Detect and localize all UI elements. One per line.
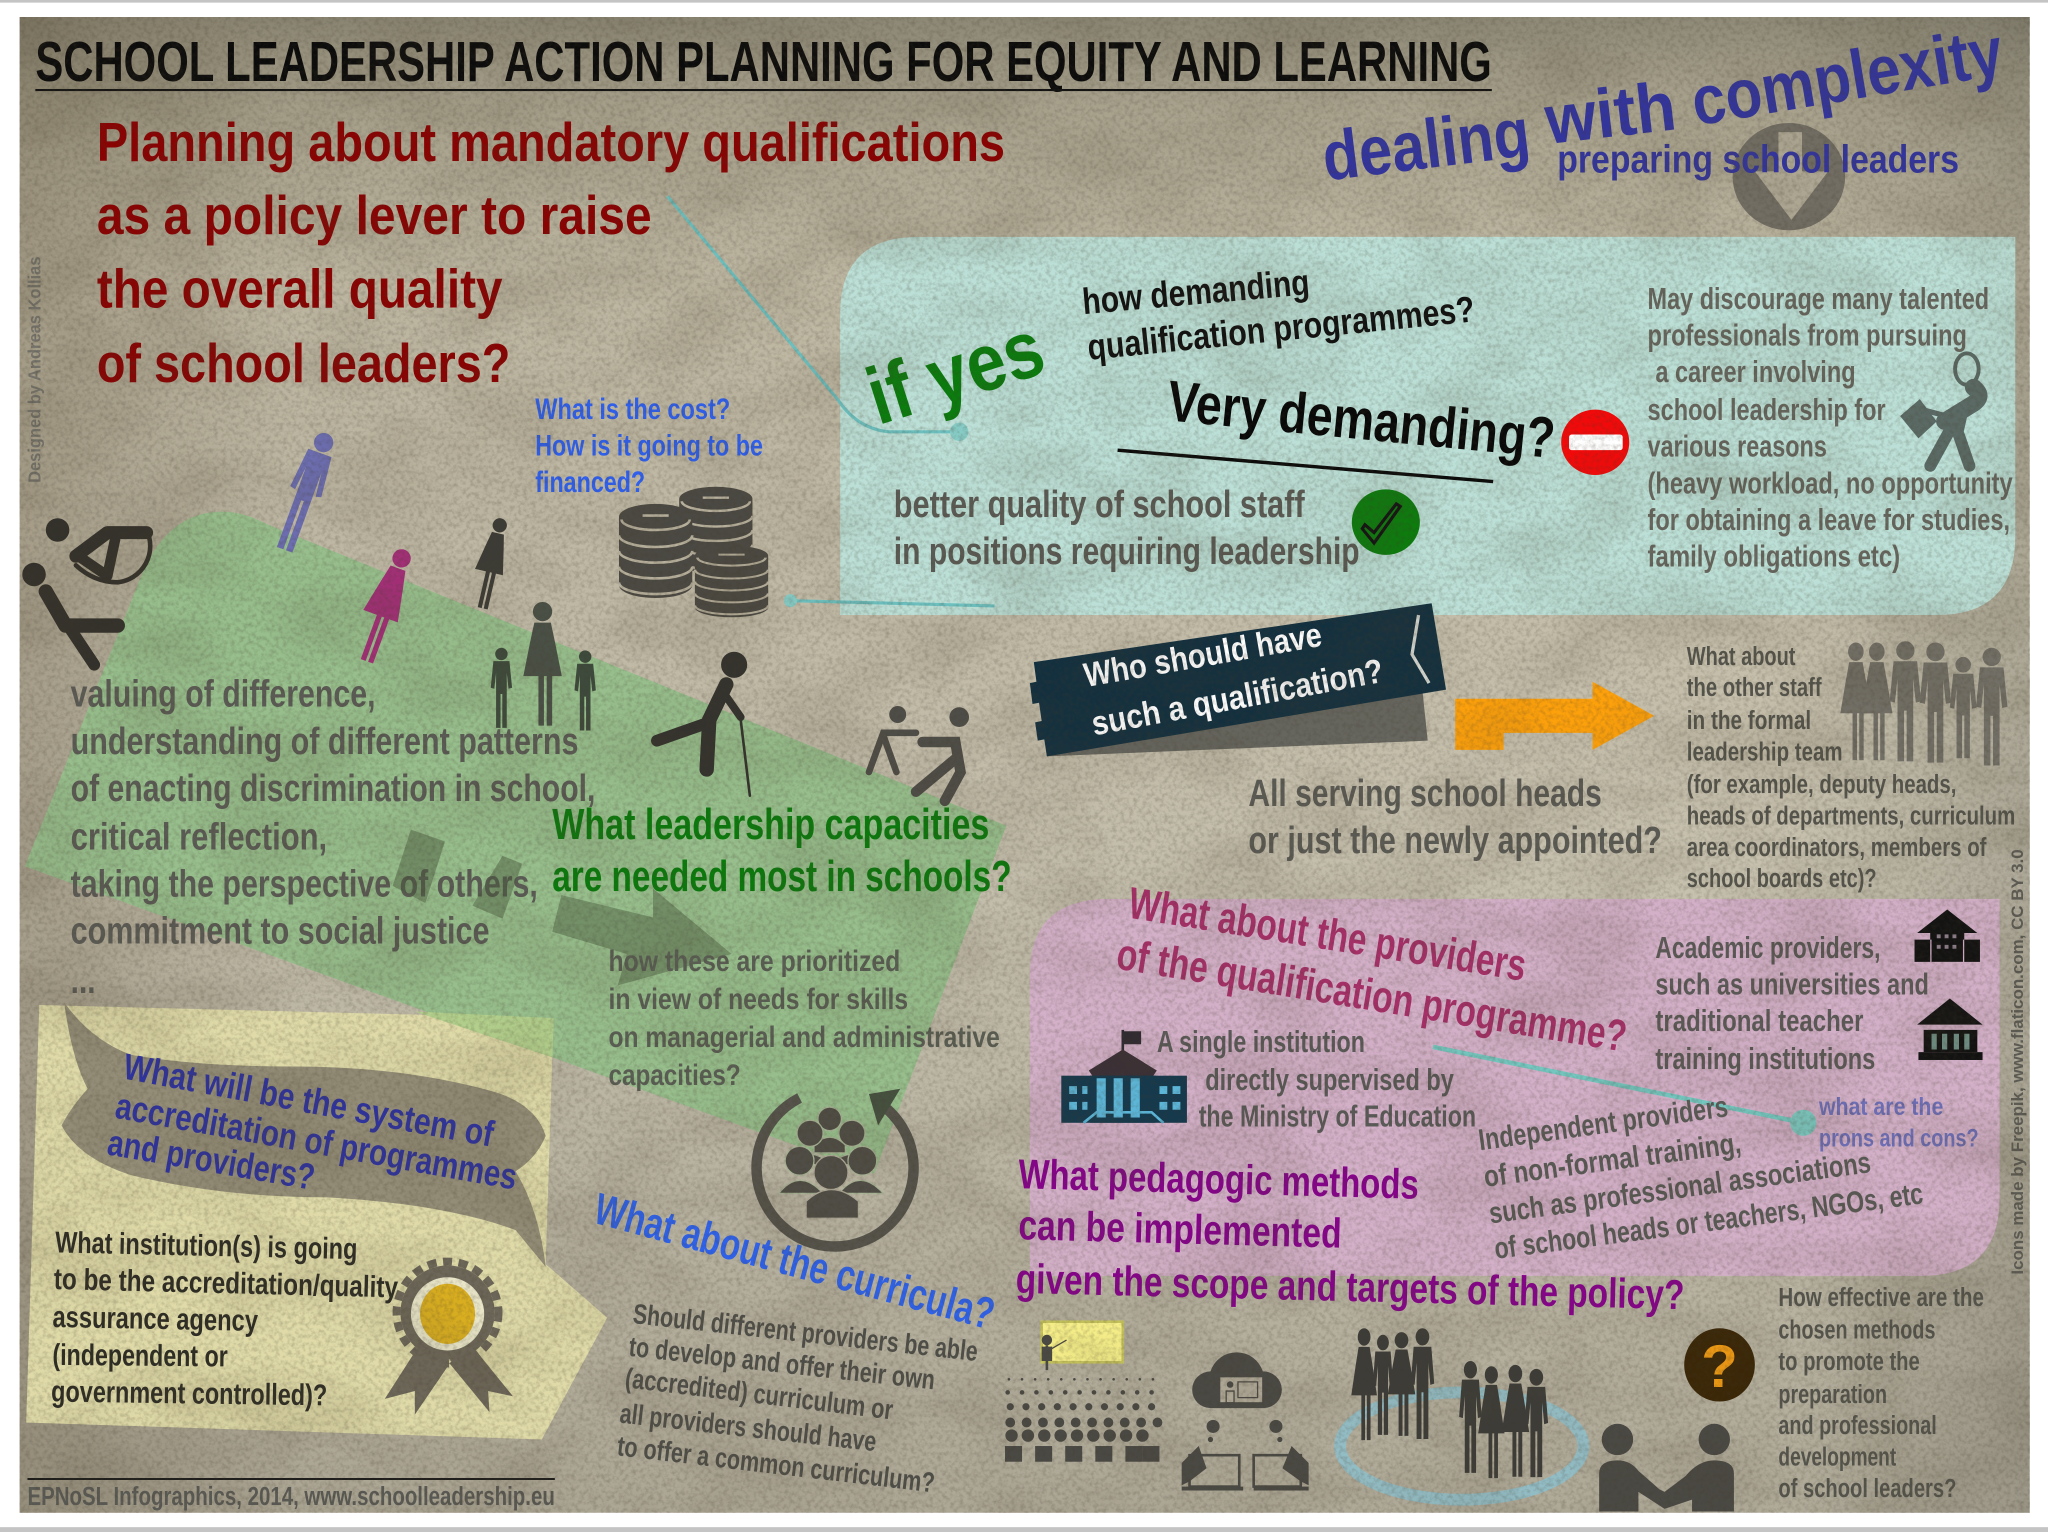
single institution text (1157, 1026, 1476, 1134)
ribbon question (1081, 616, 1386, 743)
connector line: prons and cons (1433, 1047, 1816, 1136)
prioritised text: on managerial and administrative (609, 1021, 1000, 1054)
effectiveness text (1778, 1282, 1984, 1503)
panel: providers pink (1030, 879, 2000, 1276)
icon: group ring (1340, 1392, 1583, 1500)
independent providers text: of non-formal training, (1482, 1127, 1743, 1194)
effectiveness text: to promote the (1778, 1346, 1920, 1376)
icon: bank building (1917, 998, 1983, 1060)
providers heading: What about the providers (1125, 879, 1530, 991)
providers heading: of the qualification programme? (1113, 930, 1630, 1062)
cost question: What is the cost? (535, 393, 730, 426)
vertical credit: designer: Designed by Andreas Kollias (25, 256, 45, 483)
risk text: family obligations etc) (1648, 541, 1900, 574)
other staff text: the other staff (1687, 672, 1822, 702)
accreditation body text: government controlled)? (51, 1376, 327, 1412)
ribbon question: Who should have (1081, 616, 1325, 695)
curricula text: to offer a common curriculum? (616, 1430, 936, 1498)
accreditation body text (51, 1226, 399, 1412)
panel: if yes (840, 237, 2015, 615)
icon: people in wheelchair (22, 518, 150, 665)
risk text: school leadership for (1648, 394, 1886, 427)
serving heads question: or just the newly appointed? (1248, 820, 1662, 862)
main question heading: as a policy lever to raise (97, 184, 652, 246)
icon: man (269, 428, 342, 555)
icon: question mark (1684, 1328, 1755, 1402)
pros and cons question (1818, 1093, 1979, 1152)
very demanding question: Very demanding? (1165, 369, 1558, 471)
accreditation question: What will be the system of (120, 1046, 498, 1155)
other staff text: in the formal (1687, 705, 1811, 735)
footer source: EPNoSL Infographics, 2014, www.schoolleadership.eu (27, 1481, 555, 1511)
capacities text: ... (71, 960, 96, 1002)
icon: lecture audience (1005, 1322, 1159, 1462)
icon: girl (467, 515, 515, 611)
green question heading: What leadership capacities (552, 801, 989, 849)
curricula text (616, 1298, 980, 1498)
effectiveness text: preparation (1778, 1379, 1887, 1409)
single institution text: directly supervised by (1205, 1064, 1454, 1097)
accreditation body text: (independent or (52, 1339, 228, 1373)
capacities text: understanding of different patterns (71, 721, 578, 763)
benefit text: in positions requiring leadership (894, 531, 1360, 573)
who should have ribbon (1030, 603, 1446, 756)
cost question: How is it going to be (535, 429, 763, 462)
icon: two groups silhouettes (1351, 1328, 1548, 1478)
other staff text: (for example, deputy heads, (1687, 769, 1956, 799)
icon: no entry (1561, 410, 1629, 475)
pedagogic methods heading: What pedagogic methods (1018, 1150, 1419, 1208)
icon: woman (347, 543, 422, 667)
panel: accreditation yellow (26, 1002, 607, 1439)
cost question: financed? (535, 466, 645, 499)
prioritised text: capacities? (609, 1059, 741, 1092)
pros and cons question: prons and cons? (1819, 1124, 1979, 1152)
benefit text (894, 484, 1360, 573)
curricula text: (accredited) curriculum or (623, 1362, 895, 1425)
other staff text (1687, 641, 2015, 893)
icon: team cycle (757, 1089, 914, 1246)
how demanding question (1081, 261, 1476, 368)
preparing school leaders subtitle: preparing school leaders (1557, 138, 1959, 182)
icon: coins (619, 487, 768, 617)
independent providers text (1477, 1090, 1925, 1266)
other staff text: school boards etc)? (1687, 863, 1877, 893)
green question heading: are needed most in schools? (552, 853, 1012, 901)
serving heads question: All serving school heads (1248, 773, 1602, 815)
effectiveness text: chosen methods (1778, 1315, 1935, 1345)
accreditation question: accreditation of programmes (112, 1085, 520, 1198)
pedagogic methods heading: can be implemented (1018, 1201, 1342, 1257)
dealing with complexity heading (1318, 12, 2009, 195)
risk text (1648, 283, 2013, 574)
capacities text: critical reflection, (71, 816, 327, 858)
icon: dark green arrow (393, 830, 732, 985)
benefit text: better quality of school staff (894, 484, 1305, 526)
single institution text: the Ministry of Education (1199, 1101, 1476, 1134)
capacities text (71, 674, 595, 1002)
icon: grey down arrow circle (1733, 123, 1845, 230)
ribbon question: such a qualification? (1089, 652, 1386, 743)
connector line to if yes (667, 196, 968, 441)
single institution text: A single institution (1157, 1026, 1365, 1059)
icon: old man with cane (657, 652, 750, 796)
risk text: professionals from pursuing (1648, 319, 1967, 352)
icon: green check (1352, 489, 1420, 555)
banner ribbon (62, 1002, 546, 1267)
independent providers text: of school heads or teachers, NGOs, etc (1492, 1177, 1925, 1266)
independent providers text: Independent providers (1477, 1090, 1730, 1157)
icon: handshake (1599, 1424, 1734, 1511)
dealing with complexity heading: dealing (1318, 93, 1534, 195)
main question heading (97, 111, 1005, 394)
serving heads question (1248, 773, 1662, 862)
connector from coins (784, 594, 995, 607)
capacities text: taking the perspective of others, (71, 863, 538, 905)
curricula heading: What about the curricula? (589, 1185, 1000, 1339)
main question heading: Planning about mandatory qualifications (97, 111, 1005, 173)
capacities text: commitment to social justice (71, 911, 489, 953)
main question heading: the overall quality (97, 258, 503, 320)
prioritised text: in view of needs for skills (609, 983, 908, 1016)
vertical credit: icons: Icons made by Freepik, www.flaticon.com, CC BY 3.0 (2008, 849, 2027, 1275)
pros and cons question: what are the (1818, 1093, 1943, 1121)
accreditation question: and providers? (105, 1122, 318, 1198)
main question heading: of school leaders? (97, 332, 510, 394)
accreditation body text: to be the accreditation/quality (53, 1263, 399, 1304)
accreditation body text: What institution(s) is going (55, 1226, 358, 1266)
academic providers text: training institutions (1655, 1043, 1875, 1076)
icon: school (1061, 1030, 1187, 1123)
curricula text: Should different providers be able (631, 1298, 980, 1367)
dealing with complexity heading: complexity (1686, 12, 2009, 140)
prioritised text (609, 945, 1000, 1092)
icon: university building (1915, 909, 1980, 962)
curricula text: all providers should have (618, 1398, 878, 1457)
title: SCHOOL LEADERSHIP ACTION PLANNING FOR EQUITY AND LEARNING (35, 30, 1492, 93)
icon: staff silhouettes (1840, 641, 2007, 766)
capacities text: valuing of difference, (71, 674, 376, 716)
icon: question mark: ? (1701, 1333, 1738, 1400)
academic providers text: traditional teacher (1655, 1005, 1864, 1038)
curricula text: to develop and offer their own (627, 1331, 937, 1395)
effectiveness text: development (1778, 1442, 1896, 1472)
icon: online learning cloud (1182, 1352, 1309, 1491)
if yes heading: if yes (856, 303, 1054, 442)
cost question (535, 393, 763, 499)
other staff text: leadership team (1687, 736, 1843, 766)
how demanding question: qualification programmes? (1085, 288, 1476, 368)
academic providers text: such as universities and (1655, 969, 1929, 1002)
dealing with complexity heading: with (1540, 67, 1680, 159)
providers heading (1113, 879, 1630, 1062)
icon: adult and child (869, 706, 969, 801)
academic providers text (1655, 932, 1929, 1076)
icon: rosette (385, 1262, 513, 1415)
risk text: various reasons (1648, 431, 1827, 464)
independent providers text: such as professional associations (1487, 1146, 1873, 1230)
prioritised text: how these are prioritized (609, 945, 900, 978)
effectiveness text: and professional (1778, 1410, 1937, 1440)
effectiveness text: of school leaders? (1778, 1473, 1956, 1503)
icon: walking man with briefcase (1900, 353, 1979, 466)
accreditation body text: assurance agency (52, 1301, 258, 1338)
how demanding question: how demanding (1081, 261, 1311, 322)
orange arrow (1455, 682, 1654, 750)
capacities text: of enacting discrimination in school, (71, 768, 595, 810)
green question heading (552, 801, 1012, 901)
other staff text: What about (1687, 641, 1796, 671)
icon: family (491, 602, 596, 730)
academic providers text: Academic providers, (1655, 932, 1880, 965)
pedagogic methods heading: given the scope and targets of the policy? (1015, 1255, 1685, 1318)
panel: leadership capacities green (25, 512, 1006, 1174)
pedagogic methods heading (1015, 1150, 1685, 1318)
effectiveness text: How effective are the (1778, 1282, 1984, 1312)
risk text: a career involving (1655, 356, 1856, 389)
